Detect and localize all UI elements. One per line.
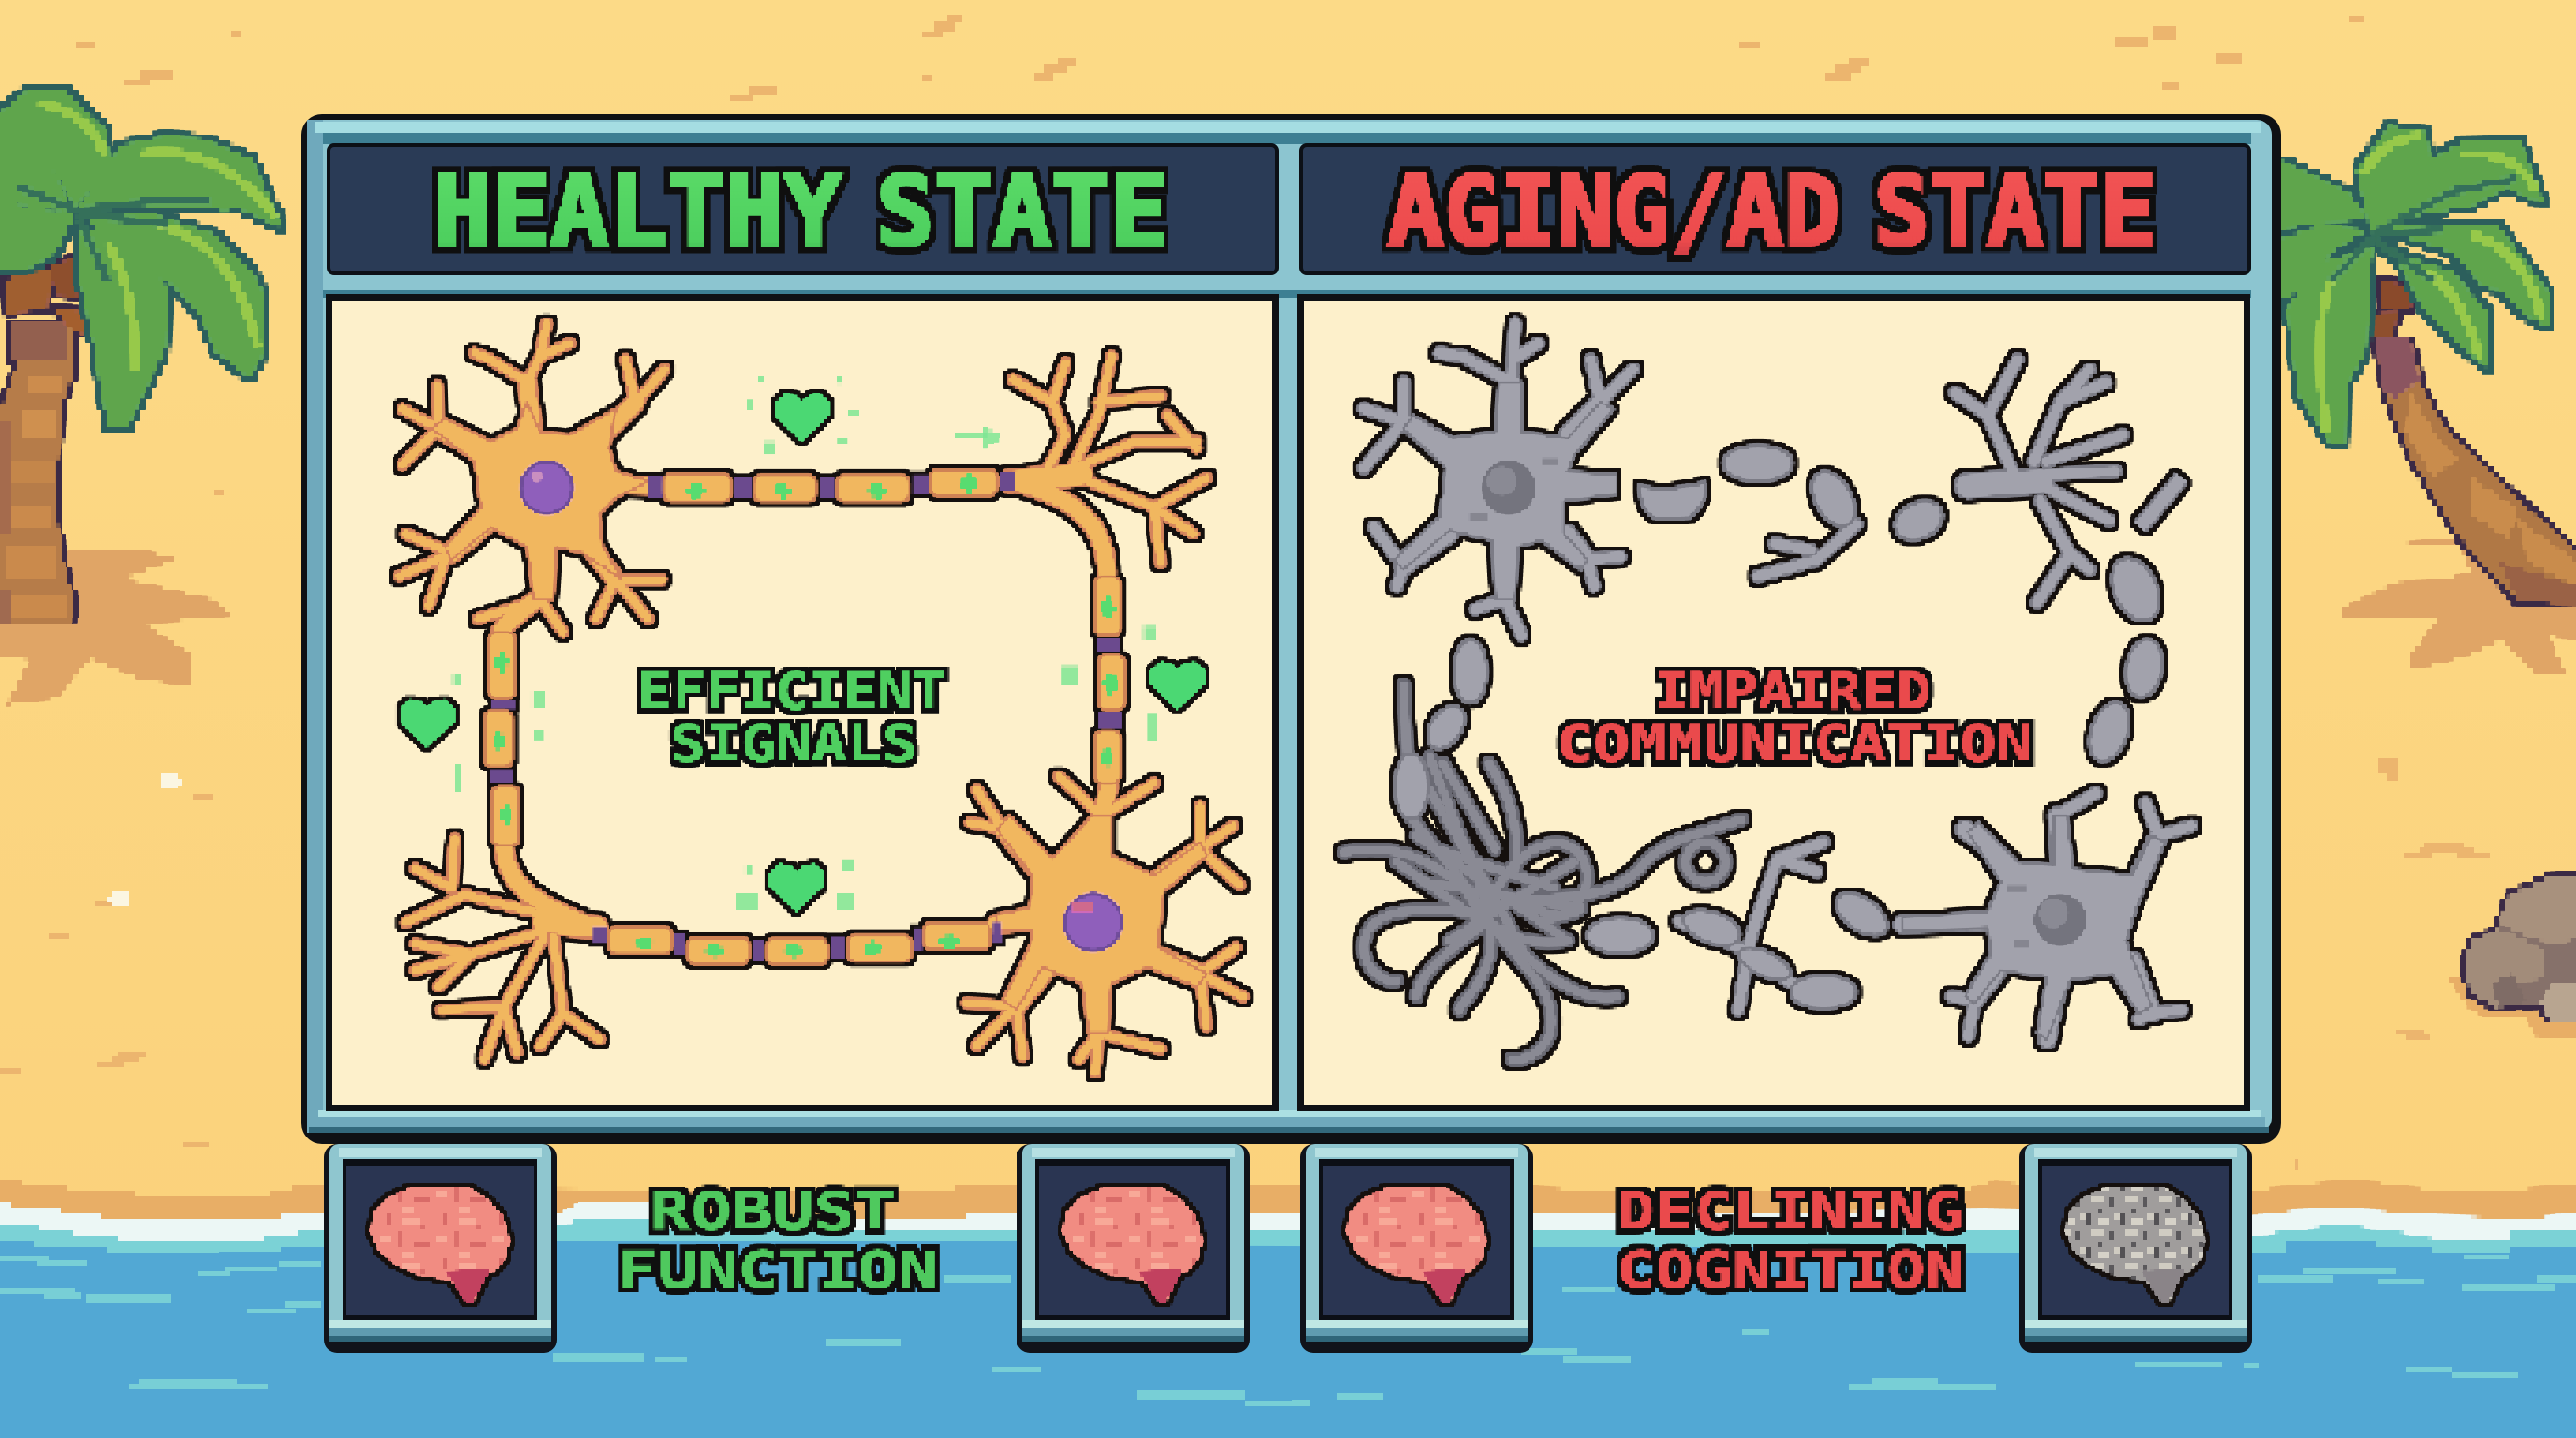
healthy header bar	[327, 143, 1279, 275]
label: robust function	[618, 1181, 938, 1301]
bottom-right cell body	[997, 816, 1207, 1033]
label: declining cognition: DECLINING	[1617, 1181, 1964, 1242]
icons: green hearts	[400, 393, 1206, 912]
left palm fronds	[0, 88, 283, 426]
panel: aging/AD state	[1297, 143, 2251, 1111]
top-left cell body	[432, 403, 649, 599]
aging diagram background	[1297, 294, 2250, 1111]
label: robust function: ROBUST	[650, 1181, 896, 1242]
signal pulses	[491, 475, 1119, 958]
myelin sheath nodes	[490, 471, 1121, 961]
healthy diagram background	[326, 294, 1279, 1111]
left palm shadow	[0, 550, 231, 705]
white shells on sand	[107, 773, 182, 906]
broken axon fragments	[1395, 446, 2182, 1008]
shoreline waves	[0, 1181, 2576, 1311]
degenerated neuron network	[1344, 324, 2191, 1060]
rocks on beach	[2448, 875, 2576, 1036]
heading: aging/AD state: AGING/AD STATE	[1387, 154, 2157, 269]
heading: healthy state: HEALTHY STATE	[433, 154, 1168, 269]
label: impaired communication	[1557, 662, 2033, 773]
sand specks	[0, 15, 2490, 1170]
label: impaired communication: COMMUNICATION	[1557, 714, 2033, 773]
water ripples	[0, 1255, 2576, 1406]
label: declining cognition	[1617, 1181, 1964, 1301]
label: robust function: FUNCTION	[618, 1240, 938, 1301]
right palm fronds	[2281, 125, 2548, 444]
label: efficient signals	[637, 662, 946, 773]
gray declining brain tile 4	[2019, 1144, 2252, 1353]
aging header bar	[1299, 143, 2251, 275]
label: declining cognition: COGNITION	[1617, 1240, 1964, 1301]
left palm trunk and coconuts	[0, 258, 91, 622]
ocean water	[0, 1236, 2576, 1438]
right palm trunk and coconuts	[2368, 278, 2576, 605]
label: impaired communication: IMPAIRED	[1654, 662, 1931, 721]
green sparkles and arrow	[453, 376, 1155, 911]
aging brain tile 3	[1300, 1144, 1533, 1353]
dendrites and axon	[399, 324, 1243, 1072]
tangled neuron	[1344, 684, 1742, 1060]
healthy brain tile 1	[324, 1144, 557, 1353]
right palm shadow	[2340, 534, 2576, 676]
panel: healthy state	[326, 143, 1279, 1111]
healthy neuron network	[399, 324, 1243, 1072]
withered dendrites	[1364, 324, 2191, 1039]
main game-window frame	[301, 114, 2281, 1144]
myelin sheath segments	[484, 469, 1124, 963]
gray cell bodies	[1394, 383, 2165, 1039]
healthy brain tile 2	[1017, 1144, 1250, 1353]
label: efficient signals: SIGNALS	[670, 714, 917, 773]
label: efficient signals: EFFICIENT	[637, 662, 946, 721]
